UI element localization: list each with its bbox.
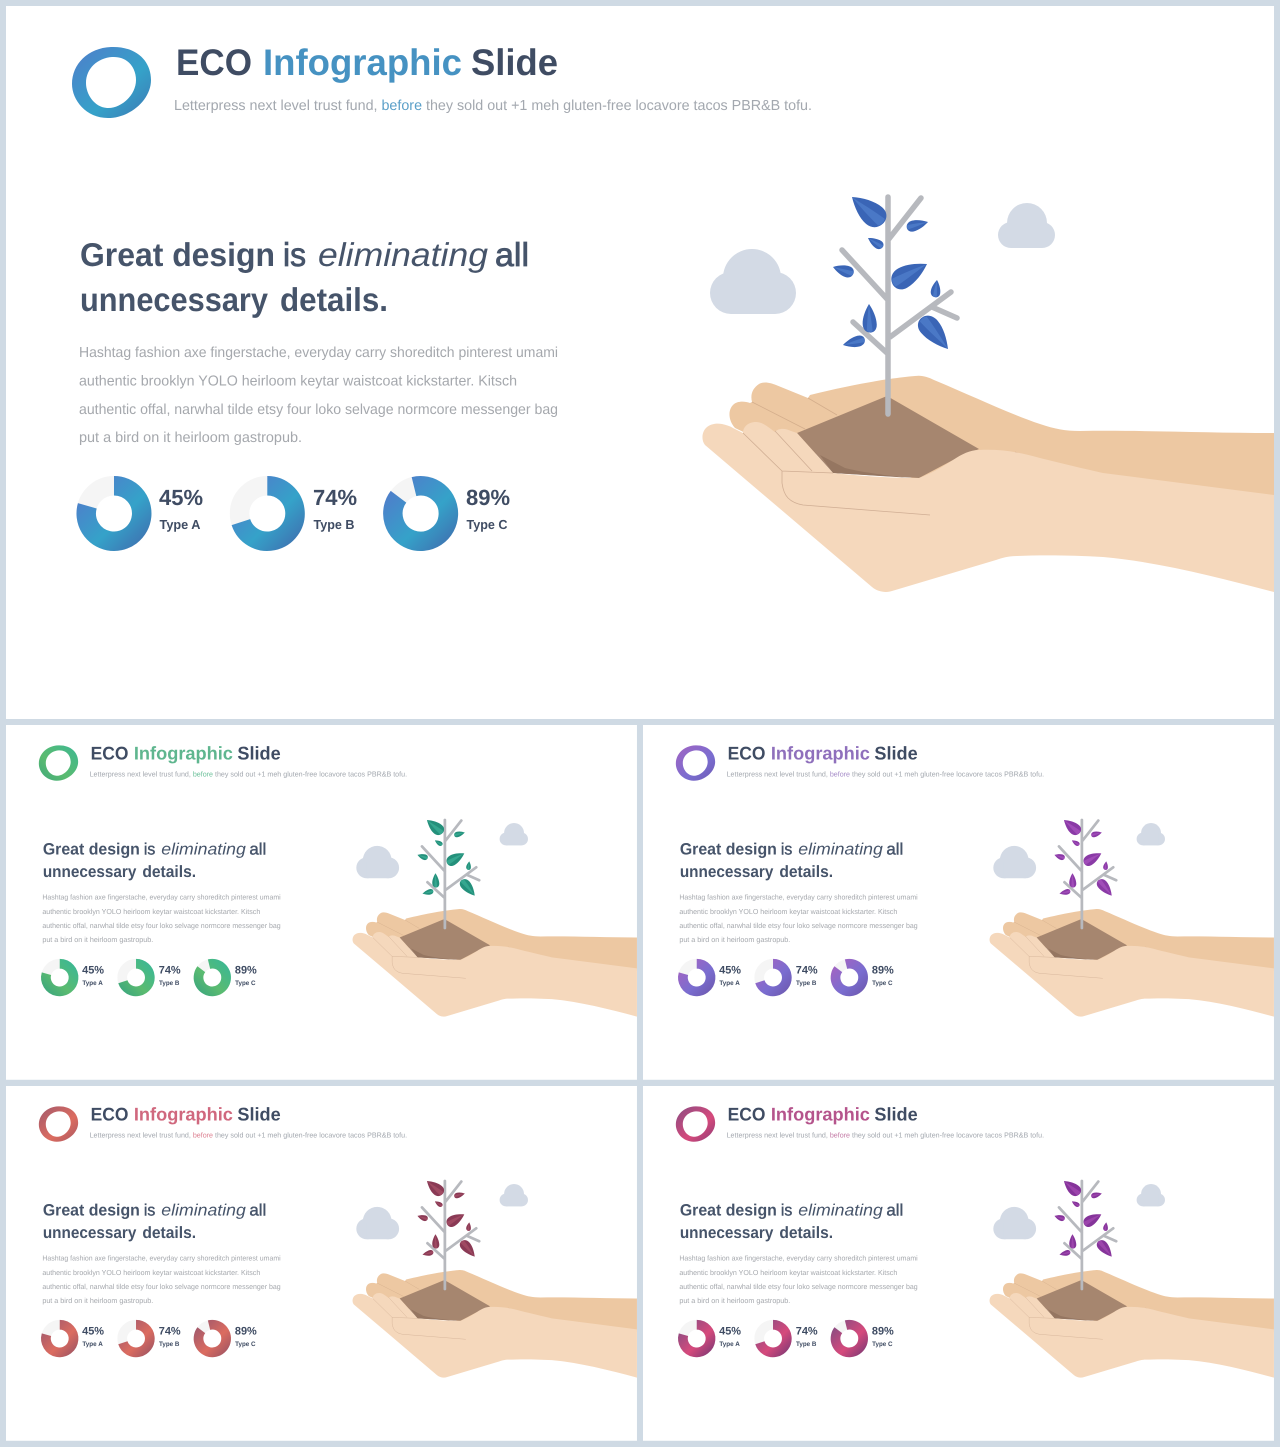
- title: Infographic: [771, 743, 870, 763]
- donut: type C 89%: [836, 964, 863, 991]
- title: Slide: [237, 1104, 281, 1124]
- heading: [80, 236, 529, 318]
- label: type C: Type C: [466, 517, 508, 532]
- cloud left: [710, 249, 796, 314]
- cloud right: [500, 823, 528, 845]
- body text: [79, 345, 558, 446]
- logo ring: [72, 47, 151, 118]
- label: type C: 89%: [872, 963, 894, 976]
- body text: put a bird on it heirloom gastropub.: [679, 936, 790, 944]
- label: type B: 74%: [796, 1324, 818, 1337]
- label: type C: 89%: [466, 485, 510, 510]
- cloud left: [356, 846, 399, 878]
- label: type C: 89%: [235, 1324, 257, 1337]
- donut: type C 89%: [836, 1325, 863, 1352]
- heading: is: [781, 839, 792, 858]
- title: Infographic: [263, 42, 462, 83]
- subtitle: Letterpress next level trust fund, before they sold out +1 meh gluten-free locavore tacos PBR&B tofu.: [174, 98, 812, 114]
- panel: red slide: [6, 1086, 637, 1441]
- label: type B: Type B: [314, 517, 354, 532]
- label: type C: Type C: [235, 1340, 256, 1348]
- subtitle: Letterpress next level trust fund, before they sold out +1 meh gluten-free locavore tacos PBR&B tofu.: [90, 771, 407, 779]
- body text: Hashtag fashion axe fingerstache, everyday carry shoreditch pinterest umami: [42, 1255, 281, 1263]
- body text: put a bird on it heirloom gastropub.: [42, 1297, 153, 1305]
- body text: [42, 1255, 281, 1305]
- title: [91, 1104, 281, 1124]
- donut: type B 74%: [240, 486, 295, 541]
- panel: green slide: [6, 725, 637, 1080]
- logo ring: [676, 745, 715, 781]
- body text: [679, 894, 918, 944]
- label: type C: Type C: [872, 979, 893, 987]
- heading: eliminating: [798, 839, 883, 858]
- label: type B: Type B: [796, 979, 816, 987]
- title: ECO: [91, 1104, 128, 1124]
- label: type A: [82, 1324, 104, 1348]
- cloud left: [993, 846, 1036, 878]
- heading: unnecessary: [80, 281, 269, 318]
- cloud right: [500, 1184, 528, 1206]
- label: type C: [872, 1324, 894, 1348]
- heading: [680, 1200, 903, 1241]
- label: type A: [159, 485, 203, 532]
- title: ECO: [728, 743, 765, 763]
- label: type A: 45%: [159, 485, 203, 510]
- logo ring: [39, 745, 78, 781]
- heading: all: [249, 1200, 266, 1219]
- heading: details.: [142, 862, 196, 880]
- label: type B: 74%: [159, 1324, 181, 1337]
- body text: authentic brooklyn YOLO heirloom keytar waistcoat kickstarter. Kitsch: [79, 374, 517, 390]
- label: type B: Type B: [159, 979, 179, 987]
- heading: unnecessary: [43, 1223, 137, 1241]
- heading: Great design: [680, 1200, 777, 1219]
- subtitle: Letterpress next level trust fund, before they sold out +1 meh gluten-free locavore tacos PBR&B tofu.: [727, 1132, 1044, 1140]
- label: type B: 74%: [159, 963, 181, 976]
- donut: type B 74%: [759, 964, 787, 991]
- heading: all: [886, 1200, 903, 1219]
- body text: [679, 1255, 918, 1305]
- label: type A: Type A: [719, 979, 740, 987]
- body text: put a bird on it heirloom gastropub.: [679, 1297, 790, 1305]
- label: type A: [719, 1324, 741, 1348]
- heading: unnecessary: [680, 1223, 774, 1241]
- donut: type A 45%: [46, 964, 74, 991]
- title: Slide: [471, 42, 558, 83]
- cloud right: [1137, 1184, 1165, 1206]
- label: type A: Type A: [82, 1340, 103, 1348]
- body text: authentic offal, narwhal tilde etsy four loko selvage normcore messenger bag: [79, 402, 558, 418]
- heading: is: [144, 839, 155, 858]
- label: type B: [159, 963, 181, 987]
- heading: unnecessary: [680, 862, 774, 880]
- label: type C: 89%: [872, 1324, 894, 1337]
- label: type A: 45%: [82, 963, 104, 976]
- body text: authentic brooklyn YOLO heirloom keytar waistcoat kickstarter. Kitsch: [42, 908, 260, 916]
- body text: authentic offal, narwhal tilde etsy four loko selvage normcore messenger bag: [679, 922, 918, 930]
- title: Slide: [874, 1104, 918, 1124]
- panel: purple slide: [643, 725, 1274, 1080]
- heading: is: [144, 1200, 155, 1219]
- heading: Great design: [43, 839, 140, 858]
- body text: Hashtag fashion axe fingerstache, everyday carry shoreditch pinterest umami: [42, 894, 281, 902]
- cloud right: [1137, 823, 1165, 845]
- title: [91, 743, 281, 763]
- heading: eliminating: [318, 236, 489, 273]
- label: type B: Type B: [159, 1340, 179, 1348]
- hands holding soil: [990, 1270, 1274, 1378]
- title: Infographic: [134, 743, 233, 763]
- label: type B: 74%: [796, 963, 818, 976]
- body text: authentic brooklyn YOLO heirloom keytar waistcoat kickstarter. Kitsch: [679, 1269, 897, 1277]
- body text: authentic offal, narwhal tilde etsy four loko selvage normcore messenger bag: [42, 1283, 281, 1291]
- panel: magenta slide: [643, 1086, 1274, 1441]
- heading: [43, 839, 266, 880]
- cloud left: [993, 1207, 1036, 1239]
- hands holding soil: [353, 909, 637, 1017]
- title: [728, 1104, 918, 1124]
- heading: Great design: [680, 839, 777, 858]
- label: type B: [313, 485, 357, 532]
- donut: type A 45%: [683, 964, 711, 991]
- heading: [680, 839, 903, 880]
- sapling: [417, 1177, 479, 1289]
- heading: eliminating: [161, 839, 246, 858]
- donut: type A 45%: [46, 1325, 74, 1352]
- body text: Hashtag fashion axe fingerstache, everyday carry shoreditch pinterest umami: [679, 894, 918, 902]
- sapling: [1054, 1177, 1116, 1289]
- sapling: [831, 188, 957, 414]
- body text: authentic brooklyn YOLO heirloom keytar waistcoat kickstarter. Kitsch: [679, 908, 897, 916]
- label: type A: [719, 963, 741, 987]
- label: type C: [872, 963, 894, 987]
- donut: type C 89%: [199, 964, 226, 991]
- label: type A: 45%: [719, 963, 741, 976]
- sapling: [1054, 816, 1116, 928]
- label: type B: 74%: [313, 485, 357, 510]
- label: type C: [235, 1324, 257, 1348]
- body text: authentic offal, narwhal tilde etsy four loko selvage normcore messenger bag: [679, 1283, 918, 1291]
- heading: all: [495, 236, 529, 273]
- hands holding soil: [702, 376, 1274, 592]
- title: ECO: [91, 743, 128, 763]
- donut: type A 45%: [86, 486, 142, 541]
- heading: all: [249, 839, 266, 858]
- heading: eliminating: [161, 1200, 246, 1219]
- heading: [43, 1200, 266, 1241]
- label: type C: [235, 963, 257, 987]
- title: ECO: [176, 42, 252, 83]
- heading: details.: [142, 1223, 196, 1241]
- donut: type B 74%: [759, 1325, 787, 1352]
- donut: type C 89%: [393, 486, 448, 541]
- label: type C: Type C: [235, 979, 256, 987]
- label: type B: Type B: [796, 1340, 816, 1348]
- label: type B: [796, 963, 818, 987]
- heading: is: [283, 236, 306, 273]
- logo ring: [39, 1106, 78, 1142]
- heading: details.: [779, 1223, 833, 1241]
- label: type B: [796, 1324, 818, 1348]
- donut: type B 74%: [122, 1325, 150, 1352]
- label: type B: [159, 1324, 181, 1348]
- label: type A: Type A: [160, 517, 201, 532]
- panel: main blue slide: [6, 6, 1274, 719]
- body text: authentic brooklyn YOLO heirloom keytar waistcoat kickstarter. Kitsch: [42, 1269, 260, 1277]
- label: type C: [466, 485, 510, 532]
- donut: type A 45%: [683, 1325, 711, 1352]
- subtitle: Letterpress next level trust fund, before they sold out +1 meh gluten-free locavore tacos PBR&B tofu.: [727, 771, 1044, 779]
- label: type A: 45%: [719, 1324, 741, 1337]
- cloud left: [356, 1207, 399, 1239]
- hands holding soil: [990, 909, 1274, 1017]
- heading: Great design: [43, 1200, 140, 1219]
- label: type A: [82, 963, 104, 987]
- body text: put a bird on it heirloom gastropub.: [79, 430, 302, 446]
- hands holding soil: [353, 1270, 637, 1378]
- body text: authentic offal, narwhal tilde etsy four loko selvage normcore messenger bag: [42, 922, 281, 930]
- heading: unnecessary: [43, 862, 137, 880]
- body text: Hashtag fashion axe fingerstache, everyday carry shoreditch pinterest umami: [679, 1255, 918, 1263]
- title: ECO: [728, 1104, 765, 1124]
- donut: type B 74%: [122, 964, 150, 991]
- title: Infographic: [771, 1104, 870, 1124]
- heading: Great design: [80, 236, 275, 273]
- logo ring: [676, 1106, 715, 1142]
- sapling: [417, 816, 479, 928]
- body text: put a bird on it heirloom gastropub.: [42, 936, 153, 944]
- donut: type C 89%: [199, 1325, 226, 1352]
- heading: details.: [779, 862, 833, 880]
- title: [728, 743, 918, 763]
- subtitle: Letterpress next level trust fund, before they sold out +1 meh gluten-free locavore tacos PBR&B tofu.: [90, 1132, 407, 1140]
- body text: Hashtag fashion axe fingerstache, everyday carry shoreditch pinterest umami: [79, 345, 558, 361]
- title: [176, 42, 558, 83]
- label: type A: Type A: [82, 979, 103, 987]
- title: Infographic: [134, 1104, 233, 1124]
- label: type C: Type C: [872, 1340, 893, 1348]
- cloud right: [998, 203, 1055, 248]
- heading: all: [886, 839, 903, 858]
- label: type A: Type A: [719, 1340, 740, 1348]
- title: Slide: [874, 743, 918, 763]
- heading: details.: [280, 281, 388, 318]
- heading: eliminating: [798, 1200, 883, 1219]
- heading: is: [781, 1200, 792, 1219]
- body text: [42, 894, 281, 944]
- label: type A: 45%: [82, 1324, 104, 1337]
- label: type C: 89%: [235, 963, 257, 976]
- title: Slide: [237, 743, 281, 763]
